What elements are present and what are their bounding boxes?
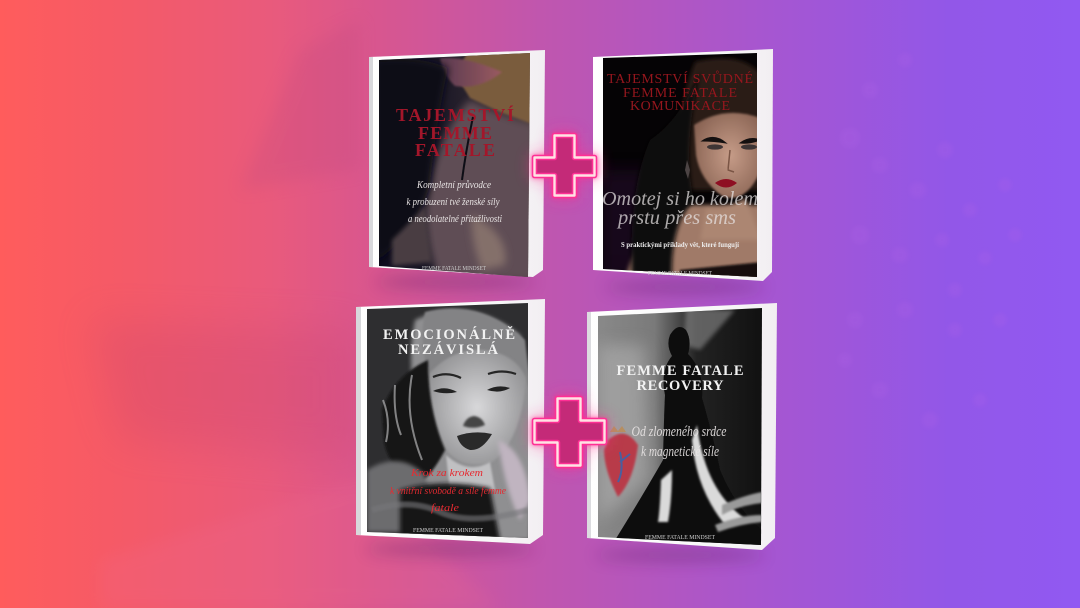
book 4 cover (595, 305, 765, 550)
book 1 title (396, 104, 514, 160)
book 4 subtitle: k magnetické síle (641, 444, 719, 460)
shadows under books (365, 276, 765, 561)
book 2 title: KOMUNIKACE (630, 99, 730, 114)
book 4 title: RECOVERY (636, 378, 724, 394)
book 3 title: NEZÁVISLÁ (398, 341, 499, 358)
book 4 body (587, 303, 777, 550)
book 2 script: Omotej si ho kolem (602, 188, 758, 210)
book 2 title (607, 69, 753, 114)
neon plus bottom (532, 396, 607, 468)
book 3 subtitle (390, 467, 506, 514)
book 1 cover (375, 48, 535, 280)
book 4 title: FEMME FATALE (616, 363, 744, 379)
book 3 title: EMOCIONÁLNĚ (383, 326, 515, 343)
book 3 subtitle: Krok za krokem (410, 467, 483, 479)
book 1 subtitle (406, 180, 502, 225)
book 2 title: TAJEMSTVÍ SVŮDNÉ (607, 69, 753, 87)
book 1 subtitle: Kompletní průvodce (416, 180, 492, 191)
book 3 subtitle: fatale (431, 502, 459, 514)
book 2 tagline: S praktickými příklady vět, které fungují (621, 240, 740, 249)
book 1: Tajemství Femme Fatale (369, 48, 545, 280)
book 3 title (383, 326, 515, 358)
book 2 body (593, 49, 773, 281)
book 3 body (356, 299, 545, 544)
book 2 title: FEMME FATALE (623, 86, 737, 101)
book 3: Emocionálně nezávislá (356, 299, 545, 545)
book 3 cover (367, 303, 528, 538)
book 1 title: FATALE (415, 140, 495, 160)
book 2 script (602, 188, 758, 229)
book 2 cover (600, 50, 762, 282)
book 4 subtitle: Od zlomeného srdce (632, 424, 727, 440)
book 1 subtitle: k probuzení tvé ženské síly (406, 197, 500, 208)
book 4 footer: FEMME FATALE MINDSET (645, 534, 715, 541)
book 1 subtitle: a neodolatelné přitažlivosti (408, 214, 502, 225)
book 2 footer: FEMME FATALE MINDSET (648, 270, 712, 277)
book 1 title: TAJEMSTVÍ (396, 104, 514, 125)
book 1 body (369, 50, 545, 277)
book 4: Femme Fatale Recovery (587, 303, 777, 550)
book 3 footer: FEMME FATALE MINDSET (413, 527, 483, 534)
book 4 subtitle (632, 424, 727, 460)
book 3 subtitle: k vnitřní svobodě a síle femme (390, 485, 506, 497)
book 2 script: prstu přes sms (616, 207, 736, 229)
book 4 title (616, 363, 744, 394)
book 1 footer: FEMME FATALE MINDSET (422, 265, 486, 272)
book 2: Tajemství svůdné Femme Fatale komunikace (593, 49, 773, 282)
neon plus top (532, 133, 597, 198)
book 1 title: FEMME (418, 123, 492, 143)
